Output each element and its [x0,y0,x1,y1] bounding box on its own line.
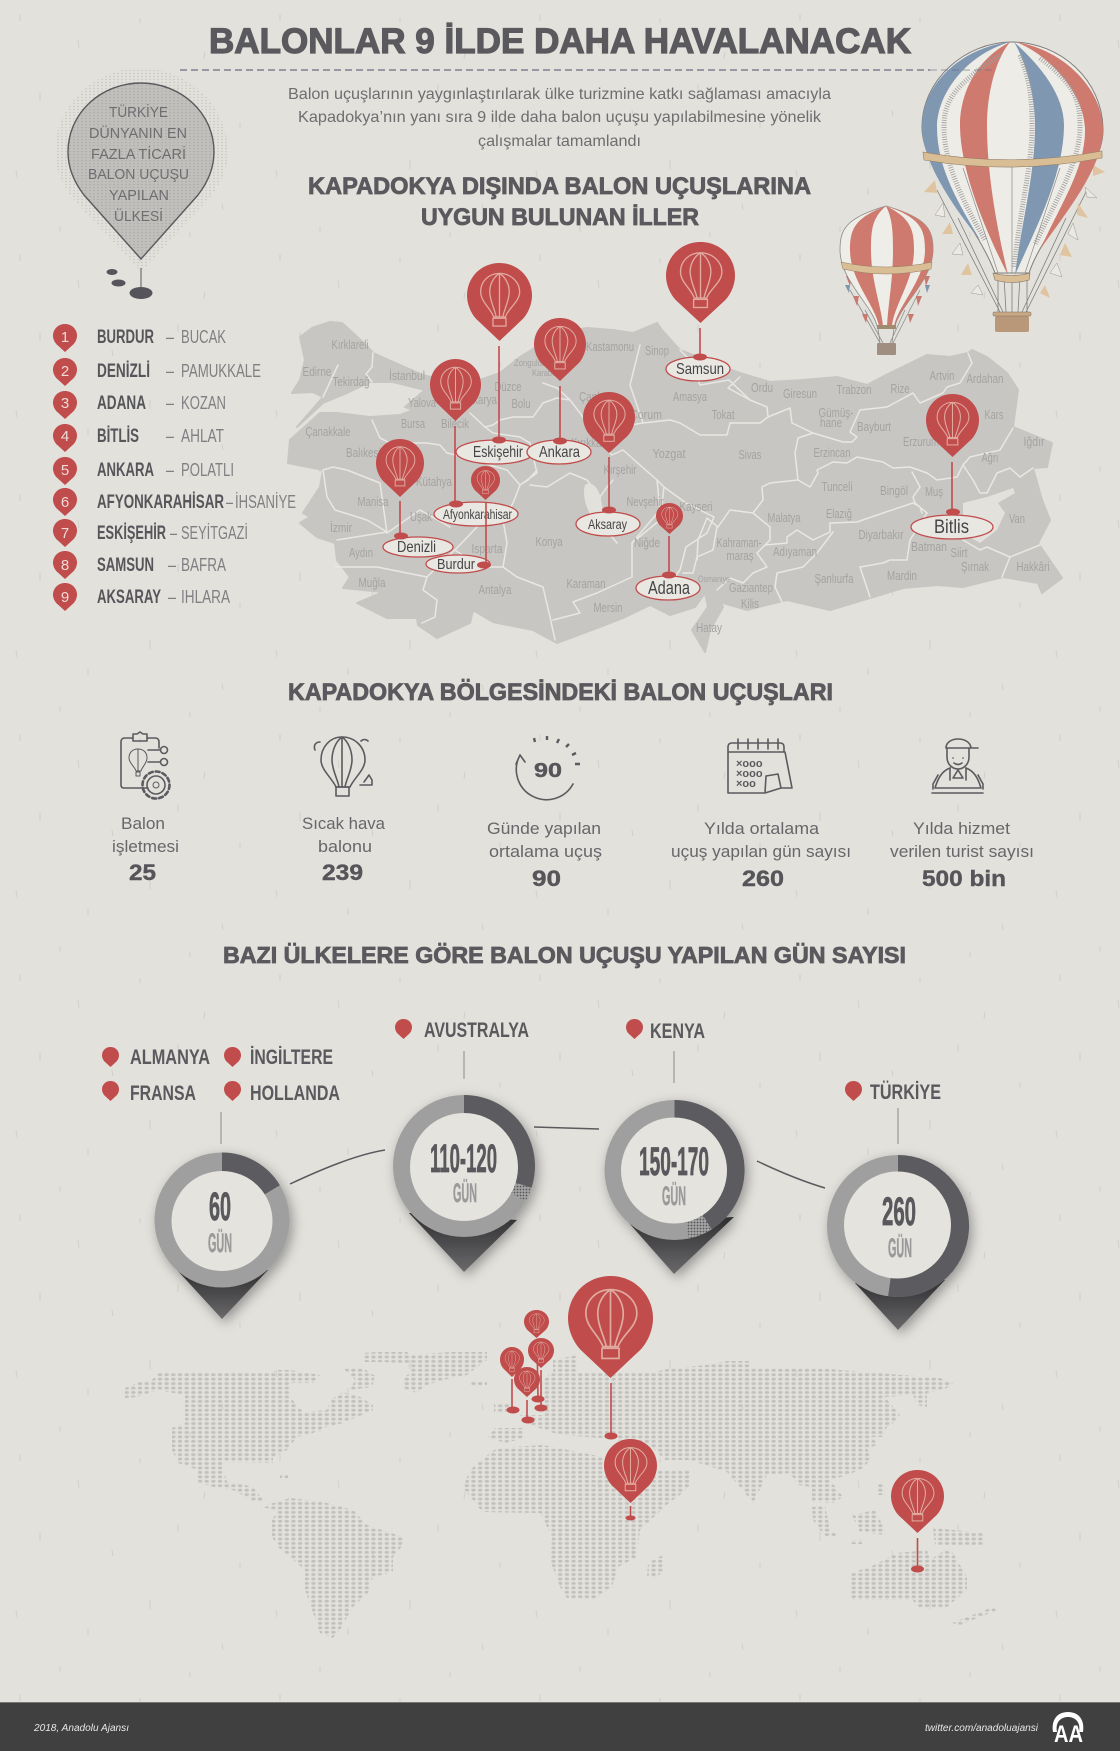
province labels: Mersin [594,601,623,615]
icon: 90 circular arrow: 90 [534,760,562,782]
icon: balloon [314,737,372,796]
world marker: İngiltere [528,1338,554,1412]
province labels: Kayseri [680,500,712,514]
province labels: Tokat [712,408,735,422]
list item 5: POLATLI [181,460,234,480]
icon: tourist with backpack [932,739,983,793]
province labels: Erzurum [903,435,939,449]
icon: clipboard and gear [121,732,170,798]
marker: Aksaray [576,392,640,536]
country tag: Kenya [626,1019,705,1043]
stat: daily flights: Günde yapılan [487,819,601,838]
small hot air balloon [840,206,933,355]
donut pin: 60 days [154,1152,290,1319]
province labels: Batman [911,540,947,554]
province labels: Çanakkale [306,425,351,439]
marker: Eskişehir [456,263,534,464]
list item 6: – [226,492,233,512]
callout pin: Türkiye: ÜLKESİ [114,207,163,225]
icon: 90 circular arrow [516,736,580,800]
province labels: Manisa [358,495,389,509]
province list [53,324,296,611]
list item 9: IHLARA [181,587,230,607]
list item 3: – [166,393,174,413]
list item 4: – [166,426,174,446]
province labels: Karabük [532,368,560,378]
list item 7: 7 [61,525,69,542]
list item 2: DENİZLİ [97,361,150,382]
list item 4: 4 [61,428,69,445]
donut pin: 150-170 days [604,1100,745,1274]
list item 6: 6 [61,494,69,511]
province labels: Antalya [478,583,512,597]
donut pin: 110-120 days: 110-120 [430,1137,497,1181]
list item 1: 1 [61,329,69,346]
province labels: Rize [890,382,910,396]
list item 2: PAMUKKALE [181,361,261,381]
icon: AA logo [1053,1712,1083,1748]
icon: calendar [728,739,792,793]
province labels: Kırşehir [604,463,636,477]
footer bar: twitter.com/anadoluajansi [925,1723,1039,1734]
marker: Denizli [376,439,453,557]
donut pin: 260 days [827,1155,969,1330]
province labels: Mardin [887,569,917,583]
list item 1: BURDUR [97,327,154,348]
section heading: flight days by country: BAZI ÜLKELERE GÖRE BALON UÇUŞU YAPILAN GÜN SAYISI [223,942,906,968]
province labels: Ordu [751,381,773,395]
world marker: Kenya [604,1439,657,1520]
province labels: Kırıkkale [571,436,609,450]
stat: daily flights: ortalama uçuş [489,842,602,861]
province labels: Kütahya [416,475,452,489]
province labels: Hatay [696,621,723,635]
subheading: suitable provinces: KAPADOKYA DIŞINDA BALON UÇUŞLARINA [308,173,811,200]
stat: balloon operators: işletmesi [112,837,179,856]
list item 3: KOZAN [181,393,226,413]
marker: Denizli: Denizli [397,539,436,556]
marker: Burdur: Burdur [437,556,475,573]
province labels: Kilis [741,597,759,611]
province labels: Sinop [645,344,669,358]
country tag: Avustralya: AVUSTRALYA [424,1019,529,1042]
country tags: 60 days: HOLLANDA [250,1082,340,1105]
callout pin: Türkiye: TÜRKİYE [109,103,168,121]
list item 4 [53,424,224,452]
province labels: Kırklareli [332,338,368,352]
stat: hot air balloons [302,737,386,885]
section heading: Cappadocia flights: KAPADOKYA BÖLGESİNDEKİ BALON UÇUŞLARI [288,679,833,706]
stat: tourists per year: 500 bin [922,866,1006,891]
province labels: Bayburt [857,420,891,434]
country tag: Türkiye [845,1081,941,1104]
icon: calendar: ×ooo [736,768,763,780]
province labels: İstanbul [389,369,425,383]
stat: hot air balloons: Sıcak hava [302,814,386,833]
list item 5: ANKARA [97,460,154,481]
list item 9: – [168,587,176,607]
icon: AA logo: AA [1054,1721,1083,1748]
footer bar [0,1702,1120,1751]
stat: flight days per year: Yılda ortalama [704,819,820,838]
marker: Aksaray: Aksaray [588,516,627,532]
list item 2: – [166,361,174,381]
list item 9 [53,583,230,611]
province labels: Bolu [512,397,531,411]
province labels: Malatya [768,511,801,525]
donut pin: 60 days: 60 [209,1185,231,1229]
list item 5: 5 [61,462,69,479]
list item 4: BİTLİS [97,426,139,447]
donut pin: 260 days: 260 [882,1190,916,1234]
list item 4: AHLAT [181,426,224,446]
world marker: Fransa [514,1367,540,1424]
callout pin: Türkiye: BALON UÇUŞU [88,166,189,183]
province labels: Van [1009,512,1025,526]
stat: tourists per year: Yılda hizmet [913,819,1010,838]
list item 1: BUCAK [181,327,226,347]
callout pin: Türkiye [55,68,228,299]
list item 9: AKSARAY [97,587,161,608]
province labels: Ardahan [966,372,1004,386]
list item 8: SAMSUN [97,555,154,576]
country tag: Avustralya [395,1019,529,1042]
country tags: 60 days: ALMANYA [130,1046,210,1069]
stat: tourists per year [890,739,1034,891]
province labels: Hakkâri [1016,560,1050,574]
subheading: suitable provinces [308,173,811,231]
province labels: Düzce [494,380,522,394]
province labels: Muğla [358,576,386,590]
province labels: maraş [726,549,754,563]
stat: balloon operators: Balon [121,814,165,833]
province labels: Yozgat [652,447,686,461]
province labels: Uşak [410,510,433,524]
callout pin: Türkiye: FAZLA TİCARİ [91,145,186,163]
province labels: Isparta [472,542,503,556]
province labels: Iğdır [1024,435,1044,449]
marker: Bitlis: Bitlis [934,517,969,538]
province labels: Zonguldak [514,358,550,368]
intro text: Balon uçuşlarının yaygınlaştırılarak ülke turizmine katkı sağlaması amacıyla [288,86,831,103]
map of Turkey [288,242,1062,652]
donut pin: 150-170 days: GÜN [662,1181,686,1211]
subheading: suitable provinces: UYGUN BULUNAN İLLER [421,204,699,231]
province labels: Bursa [401,417,425,431]
province labels: Erzincan [814,446,851,460]
stat: hot air balloons: 239 [322,860,363,885]
list item 7: ESKİŞEHİR [97,523,166,544]
stat: daily flights: 90 [532,866,561,891]
province labels: Karaman [566,577,606,591]
list item 3: 3 [61,395,69,412]
province labels: Elazığ [826,507,852,521]
province labels: Muş [925,485,943,499]
dotted world map [125,1352,997,1638]
stat: balloon operators [112,732,179,885]
province labels: Sakarya [461,393,497,407]
province labels: Gaziantep [729,581,773,595]
marker: Samsun [666,242,735,381]
province labels: Artvin [930,369,955,383]
intro text: Kapadokya’nın yanı sıra 9 ilde daha balon uçuşu yapılabilmesine yönelik [298,109,822,126]
marker: Burdur [426,466,500,573]
province labels: Adıyaman [773,545,817,559]
province labels: Amasya [673,390,707,404]
intro text: çalışmalar tamamlandı [478,133,641,150]
marker: Bitlis [911,394,993,539]
province labels: Giresun [783,387,817,401]
intro text [288,86,831,150]
list item 6 [53,488,296,516]
country tag: Türkiye: TÜRKİYE [870,1081,941,1104]
list item 3: ADANA [97,393,146,414]
marker: Ankara: Ankara [539,444,580,461]
donut pin: 60 days: GÜN [208,1228,232,1258]
province labels: Tunceli [822,480,852,494]
province labels: Niğde [634,536,660,550]
marker: Adana: Adana [648,578,691,598]
province labels: Kars [984,408,1004,422]
province labels [302,338,1050,635]
province labels: Kastamonu [586,340,634,354]
callout pin: Türkiye: YAPILAN [109,187,169,204]
list item 8: – [168,555,176,575]
province labels: Sivas [738,448,762,462]
country tag: Kenya: KENYA [650,1020,705,1043]
marker: Afyonkarahisar [430,359,518,526]
country tags: 60 days: FRANSA [130,1082,196,1105]
donut pin: 150-170 days: 150-170 [639,1140,709,1184]
marker: Samsun: Samsun [676,361,724,378]
footer bar: 2018, Anadolu Ajansı [33,1723,129,1734]
province labels: hane [820,416,842,430]
list item 7: – [170,523,177,543]
province labels: Nevşehir [626,495,664,509]
world marker: Hollanda [500,1347,524,1414]
province labels: Bingöl [880,484,908,498]
province labels: Şanlıurfa [814,572,854,586]
list item 5: – [166,460,174,480]
list item 2 [53,358,261,386]
world marker: Türkiye [568,1276,653,1440]
large hot air balloon [922,42,1105,332]
province labels: Diyarbakır [858,528,904,542]
donut pin: 110-120 days [393,1095,535,1272]
province labels: Aydın [349,546,373,560]
province labels: Bilecik [441,417,470,431]
province labels: Gümüş- [818,406,854,420]
province labels: Konya [536,535,563,549]
province labels: Trabzon [836,383,872,397]
stat: hot air balloons: balonu [318,837,372,856]
list item 6: AFYONKARAHİSAR [97,492,224,513]
marker: Eskişehir: Eskişehir [473,444,524,461]
list item 8: 8 [61,557,69,574]
marker: Adana [636,503,700,600]
list item 7: SEYİTGAZİ [181,523,248,543]
stat: flight days per year: 260 [742,866,784,891]
country tags: 60 days: İNGİLTERE [250,1046,333,1069]
list item 1: – [166,327,174,347]
province labels: Yalova [408,396,436,410]
marker: Ankara [527,318,591,464]
donut pin: 260 days: GÜN [888,1233,912,1263]
province labels: Tekirdağ [332,375,370,389]
province labels: Çorum [630,408,662,422]
province labels: Kahraman- [716,536,762,550]
province labels: Balıkesir [346,446,384,460]
stat: flight days per year: uçuş yapılan gün sayısı [671,842,851,861]
stat: tourists per year: verilen turist sayısı [890,842,1034,861]
list item 3 [53,391,226,419]
icon: calendar: ×oo [736,778,756,790]
marker: Afyonkarahisar: Afyonkarahisar [443,506,512,522]
stat: balloon operators: 25 [129,860,156,885]
province labels: Osmaniye [698,574,730,584]
province labels: Edirne [302,365,332,379]
world marker: Avustralya [891,1470,944,1572]
list item 9: 9 [61,589,69,606]
world marker: Almanya [524,1310,549,1402]
stat: flight days per year [671,739,851,891]
list item 7 [53,519,248,547]
title: BALONLAR 9 İLDE DAHA HAVALANACAK [209,22,911,61]
stat: daily flights [487,736,602,891]
donut pin: 110-120 days: GÜN [453,1178,477,1208]
icon: calendar: ×ooo [736,758,763,770]
list item 1 [53,324,226,352]
list item 2: 2 [61,363,69,380]
province labels: Ağrı [982,451,998,465]
province labels: Şırnak [961,560,990,574]
callout pin: Türkiye: DÜNYANIN EN [89,124,187,142]
list item 8: BAFRA [181,555,226,575]
province labels: İzmir [330,521,352,535]
province labels: Siirt [950,546,968,560]
list item 6: İHSANİYE [235,492,296,512]
country tags: 60 days [102,1046,340,1105]
list item 5 [53,457,234,485]
province labels: Çankırı [579,390,611,404]
list item 8 [53,551,226,579]
